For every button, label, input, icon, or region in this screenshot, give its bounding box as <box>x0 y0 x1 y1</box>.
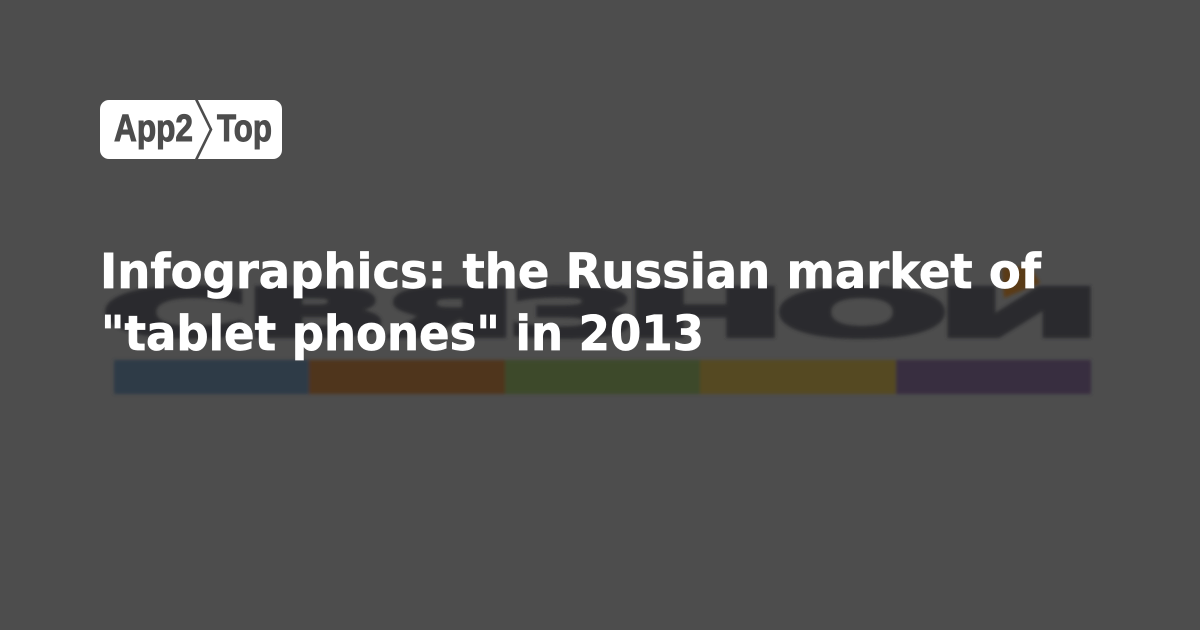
logo wordmark: З <box>507 275 637 352</box>
App2Top logo <box>100 99 282 160</box>
logo wordmark: И <box>935 275 1103 352</box>
App2: App2 <box>114 108 193 150</box>
logo wordmark: В <box>243 275 389 352</box>
title <box>100 244 1042 362</box>
chevron <box>196 99 211 160</box>
logo wordmark <box>101 275 1103 352</box>
Top: Top <box>217 108 272 150</box>
logo accent <box>1002 266 1040 298</box>
logo wordmark: О <box>775 275 949 352</box>
logo wordmark: Я <box>381 275 517 352</box>
title: "tablet phones" in 2013 <box>101 306 704 362</box>
logo colour bands <box>114 360 1091 394</box>
title: Infographics: the Russian market of <box>100 244 1042 300</box>
blurred background logo <box>101 266 1103 394</box>
logo wordmark: Н <box>623 275 787 352</box>
logo wordmark: С <box>101 275 249 352</box>
